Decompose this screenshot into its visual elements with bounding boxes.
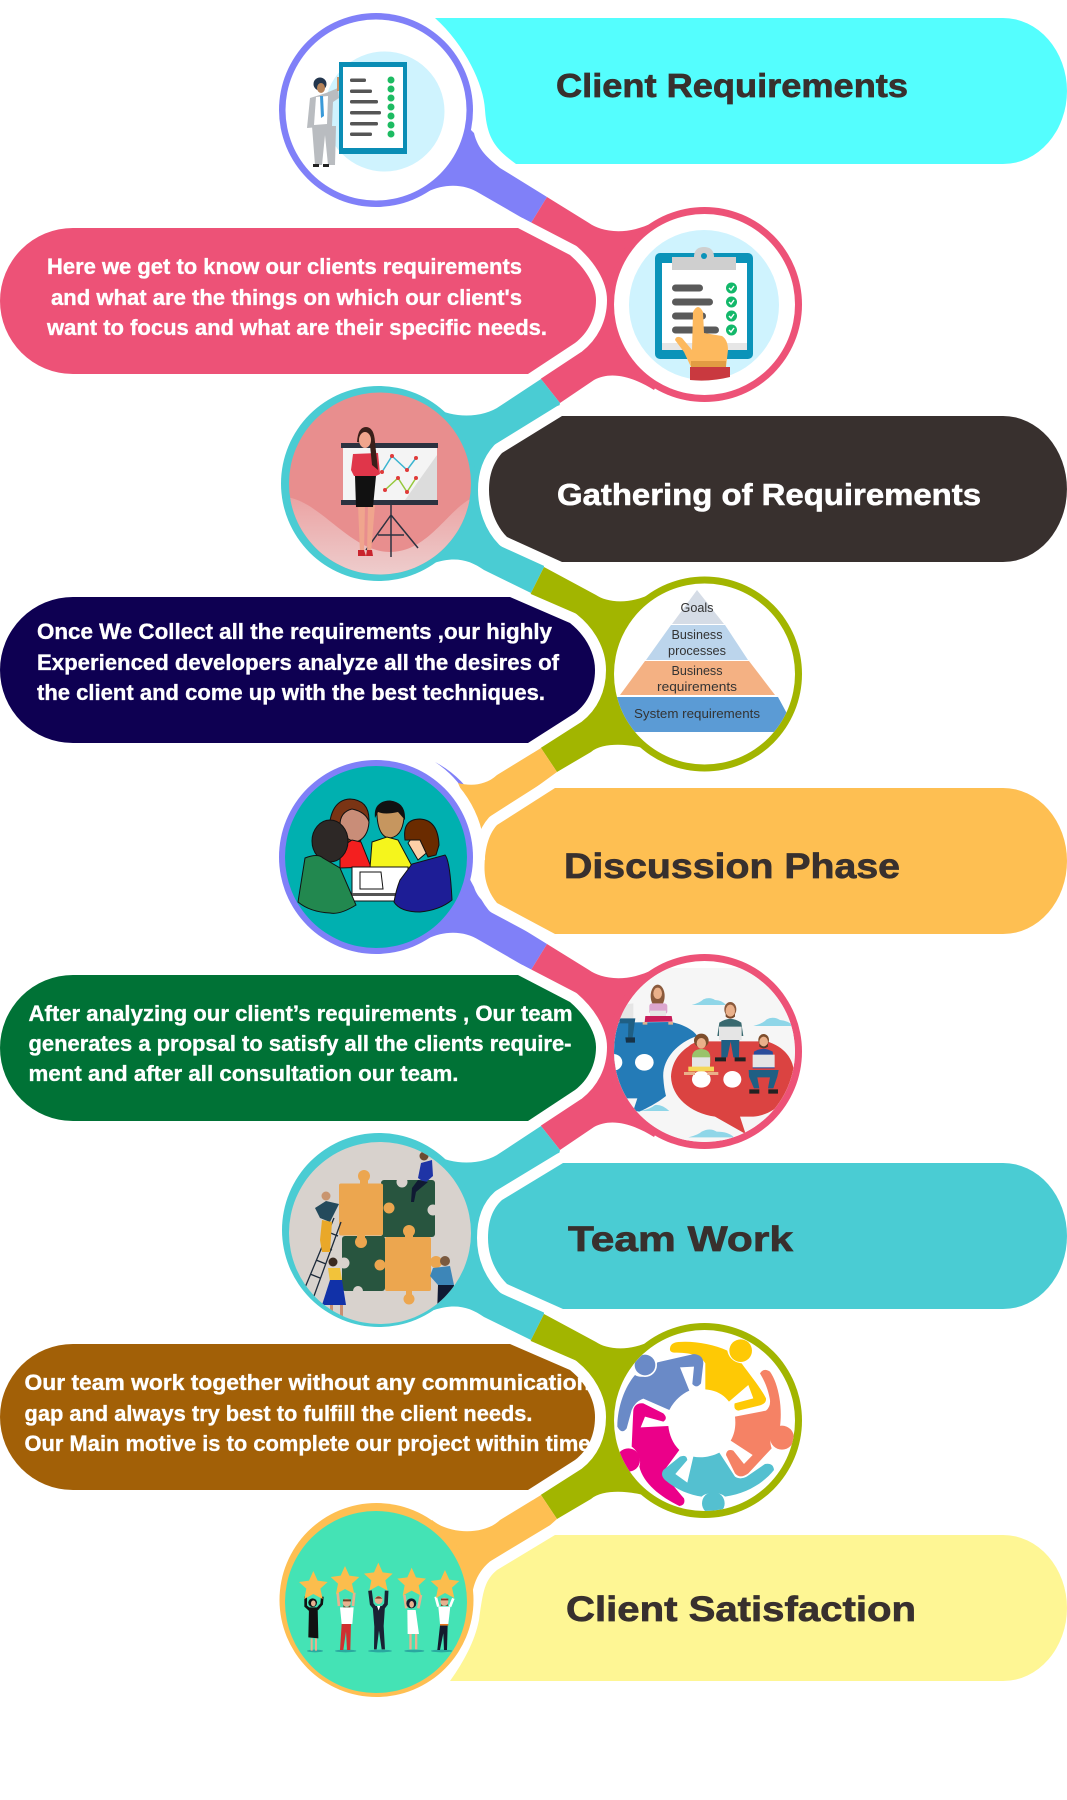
icon: team assembling puzzle bbox=[282, 1133, 476, 1327]
panel: client requirements title bbox=[435, 18, 1067, 164]
panel: team work description bbox=[0, 1344, 595, 1490]
connector: orange to discussion phase bbox=[458, 748, 557, 835]
text block: pyramid labels: Business bbox=[672, 663, 723, 678]
panel: discussion phase title bbox=[484, 788, 1067, 934]
icon: clipboard with pointing hand bbox=[607, 207, 802, 402]
text block: analysis lines bbox=[37, 619, 560, 705]
text block: team work lines: Our team work together without any communication bbox=[24, 1370, 590, 1395]
connector: teal step three bbox=[376, 379, 560, 593]
heading: client satisfaction: Client Satisfaction bbox=[566, 1590, 916, 1629]
text block: proposal lines: generates a propsal to satisfy all the clients require- bbox=[28, 1031, 572, 1056]
text block: proposal lines: After analyzing our client’s requirements , Our team bbox=[28, 1001, 572, 1026]
heading: gathering of requirements: Gathering of Requirements bbox=[557, 477, 981, 512]
heading: client requirements: Client Requirements bbox=[556, 67, 908, 104]
icon: woman presenting chart bbox=[281, 386, 476, 585]
text block: description lines: Here we get to know our clients requirements bbox=[47, 254, 522, 279]
icon: people on speech bubbles bbox=[604, 954, 802, 1149]
panel: proposal description bbox=[0, 975, 596, 1121]
text block: analysis lines: the client and come up with the best techniques. bbox=[37, 680, 545, 705]
connector: orange to client satisfaction bbox=[376, 1495, 557, 1655]
text block: pyramid labels bbox=[634, 600, 761, 721]
panel: analysis description bbox=[0, 597, 595, 743]
connector: green step eight bbox=[500, 1314, 704, 1519]
panel: team work title bbox=[488, 1163, 1067, 1309]
text block: analysis lines: Experienced developers analyze all the desires of bbox=[37, 650, 560, 675]
icon: circle of teamwork figures bbox=[607, 1323, 802, 1518]
text block: team work lines: Our Main motive is to complete our project within time bbox=[24, 1431, 590, 1456]
connector: blue discussion to step six bbox=[376, 857, 547, 970]
text block: team work lines bbox=[24, 1370, 590, 1456]
text block: analysis lines: Once We Collect all the requirements ,our highly bbox=[37, 619, 553, 644]
text block: proposal lines bbox=[28, 1001, 572, 1086]
panel: client requirements description bbox=[0, 228, 596, 374]
connector: client requirements to step two bbox=[376, 110, 547, 223]
text block: pyramid labels: Business bbox=[672, 627, 723, 642]
text block: pyramid labels: processes bbox=[668, 643, 726, 658]
text block: pyramid labels: Goals bbox=[680, 600, 714, 615]
connector: teal team work bbox=[376, 1126, 560, 1340]
icon: four people in discussion bbox=[279, 760, 485, 954]
text block: pyramid labels: requirements bbox=[657, 679, 738, 694]
heading: discussion phase: Discussion Phase bbox=[564, 847, 900, 886]
heading: team work: Team Work bbox=[568, 1220, 794, 1259]
text block: description lines: want to focus and what are their specific needs. bbox=[46, 315, 547, 340]
text block: team work lines: gap and always try best to fulfill the client needs. bbox=[24, 1401, 532, 1426]
text block: description lines: and what are the things on which our client's bbox=[51, 285, 522, 310]
connector: pink step six bbox=[500, 944, 704, 1150]
text block: pyramid labels: System requirements bbox=[634, 706, 761, 721]
text block: proposal lines: ment and after all consultation our team. bbox=[28, 1061, 458, 1086]
text block: description lines bbox=[46, 254, 547, 340]
panel: gathering of requirements title bbox=[489, 416, 1067, 562]
connector: green step four bbox=[500, 567, 704, 772]
connector: pink step two bbox=[500, 197, 704, 403]
icon: presenter with checklist bbox=[279, 13, 473, 207]
panel: client satisfaction title bbox=[450, 1535, 1067, 1681]
connector: blue sliver behind discussion circle bbox=[435, 762, 478, 816]
icon: five people holding stars bbox=[280, 1503, 474, 1697]
icon: requirements pyramid bbox=[600, 576, 802, 772]
